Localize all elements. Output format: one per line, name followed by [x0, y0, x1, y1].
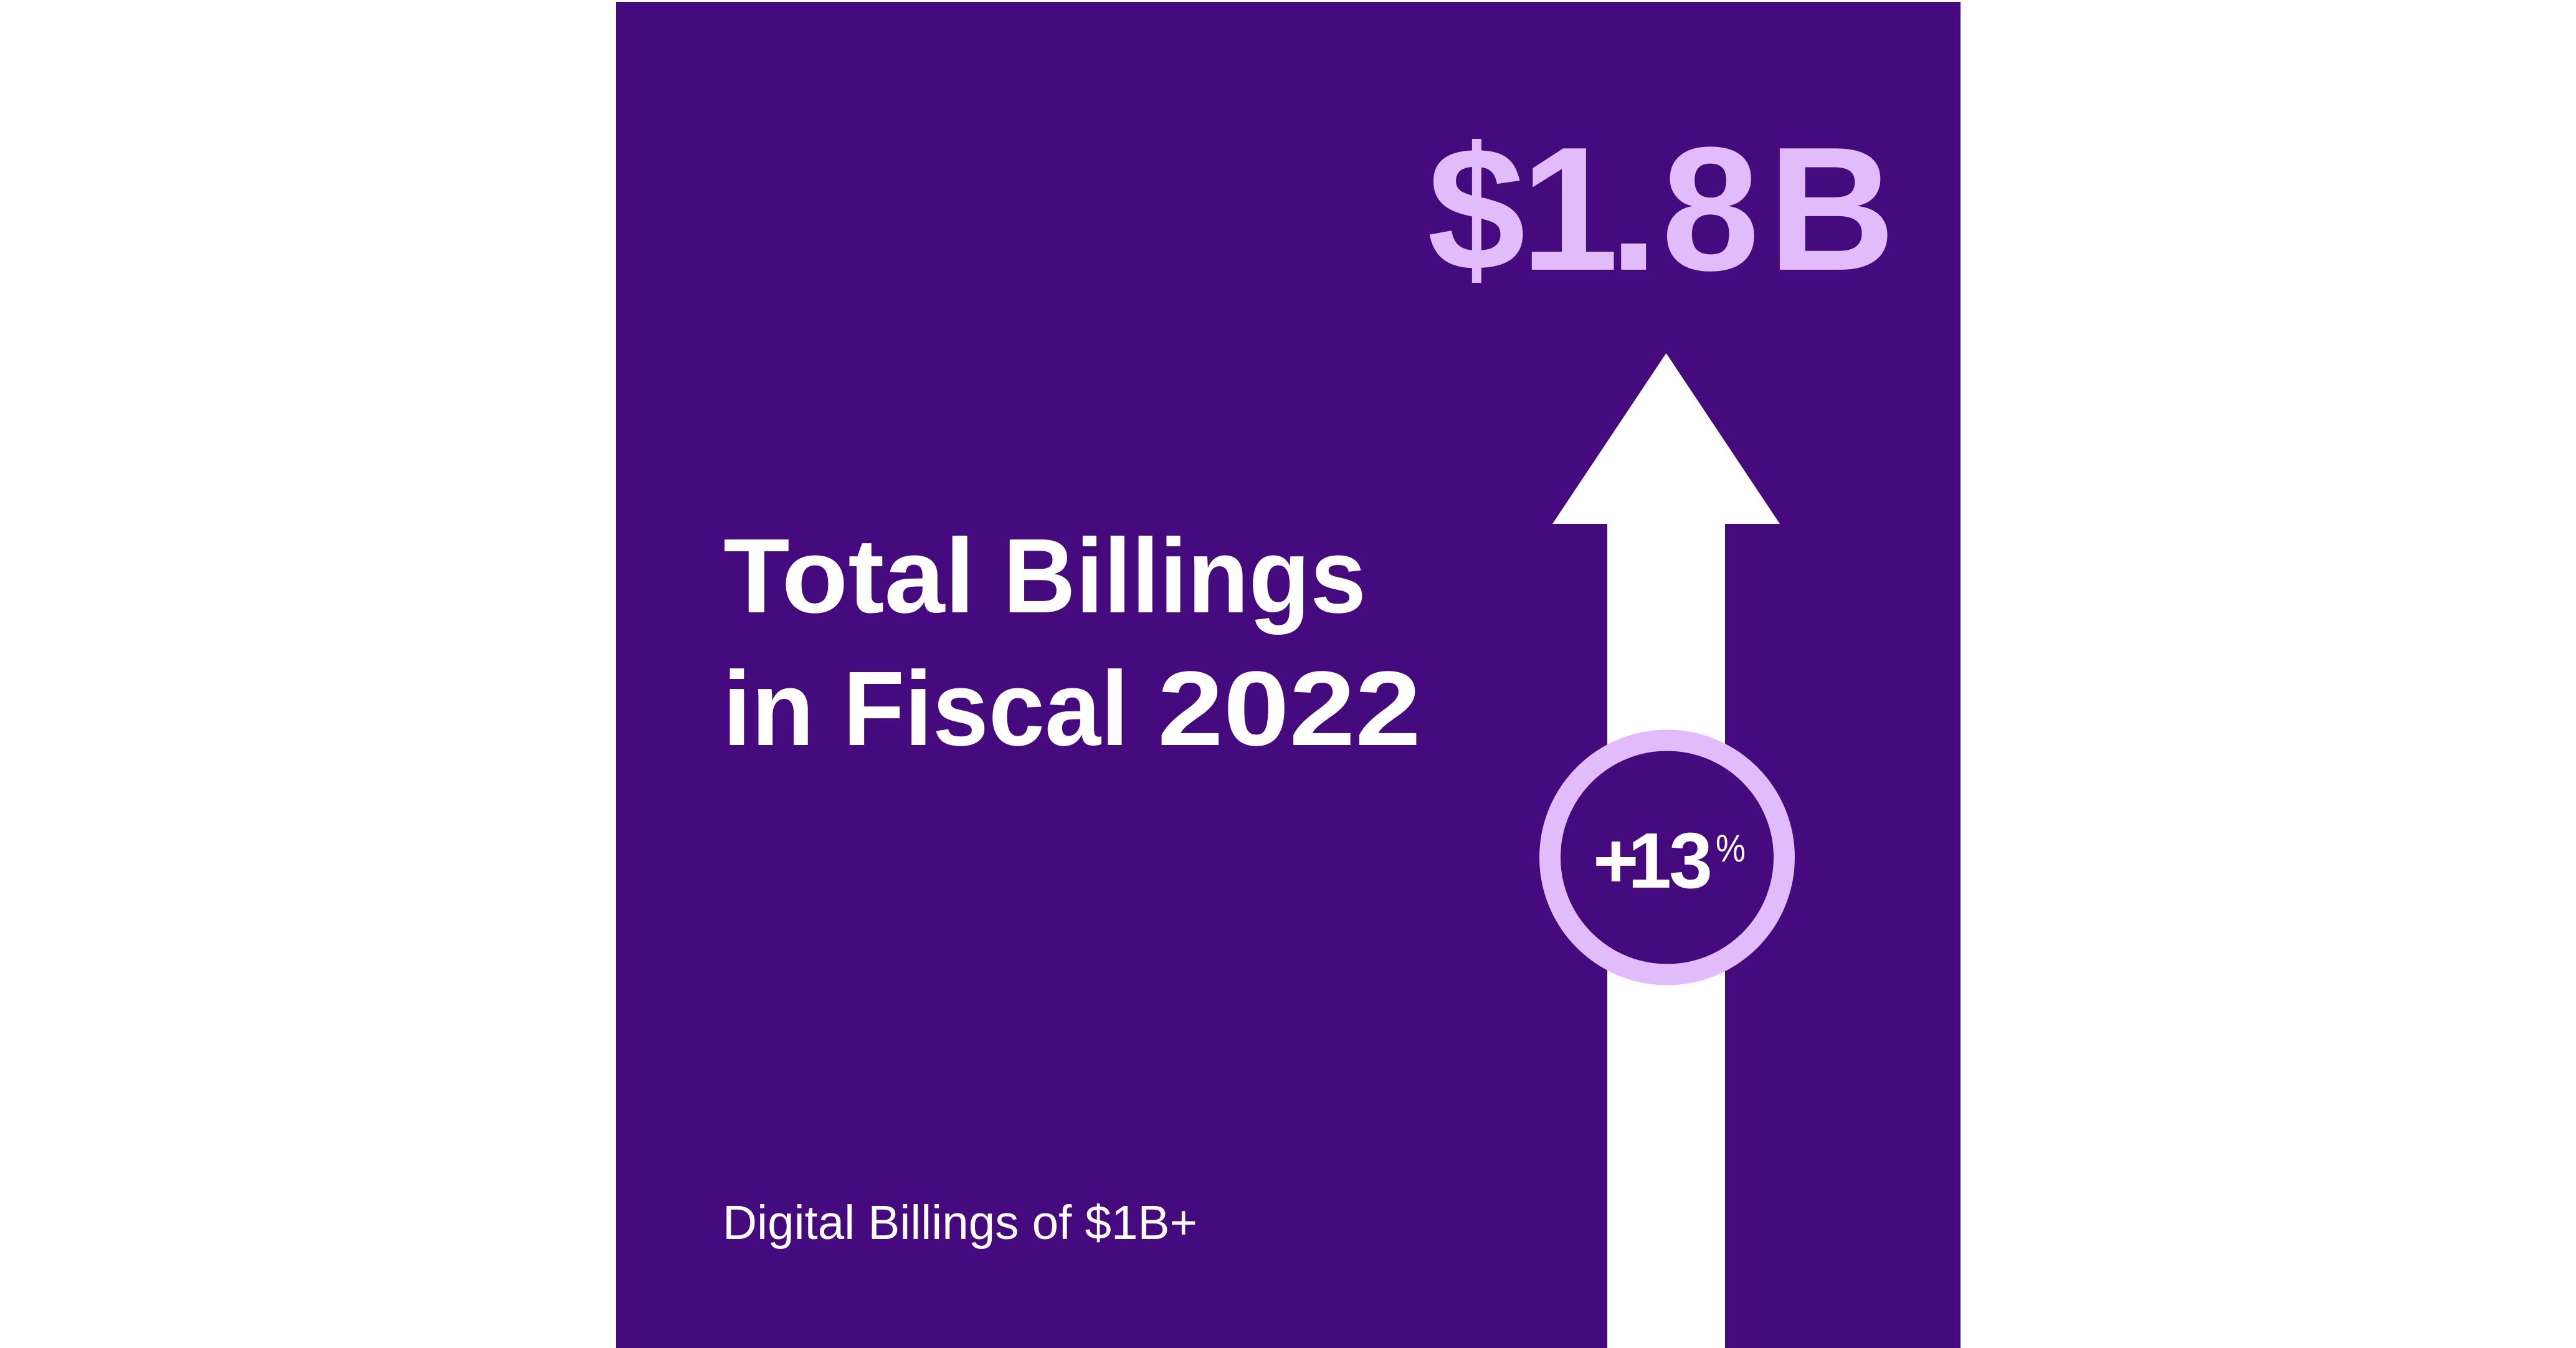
panel: purple background	[616, 2, 1961, 1348]
heading: Total Billings in Fiscal 2022: Fiscal	[843, 650, 1129, 768]
heading: Total Billings in Fiscal 2022: Billings	[1003, 517, 1366, 635]
heading: Total Billings in Fiscal 2022: in	[723, 650, 814, 768]
callout: +13% growth ring: %	[1716, 827, 1746, 870]
heading: Total Billings in Fiscal 2022: 2022	[1157, 650, 1421, 768]
arrow: upward growth arrow	[1552, 353, 1780, 1348]
heading: Total Billings in Fiscal 2022: Total	[723, 517, 975, 635]
heading: Total Billings in Fiscal 2022	[723, 517, 1421, 768]
big number: $1.8B: $1.8B	[1427, 110, 1895, 307]
callout: +13% growth ring	[1550, 740, 1784, 974]
text: digital billings note: Digital Billings of $1B+	[723, 1196, 1197, 1250]
callout: +13% growth ring: +13	[1593, 817, 1713, 904]
